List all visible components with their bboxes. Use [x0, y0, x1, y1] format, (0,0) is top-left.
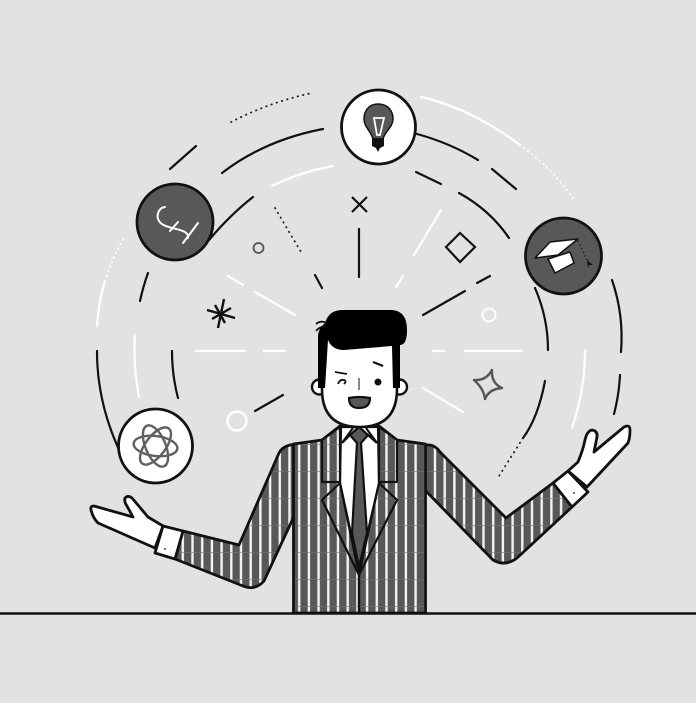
hair tuft	[316, 322, 327, 331]
white orbit dashes	[97, 97, 585, 428]
necktie	[350, 427, 368, 567]
icon: pound sign	[137, 184, 213, 260]
icon: atom	[118, 409, 192, 483]
black orbit dashes	[97, 129, 622, 456]
open eye	[374, 378, 382, 386]
floor line	[0, 612, 696, 615]
hair	[318, 310, 407, 388]
left collar and lapel	[322, 427, 340, 482]
man: left arm and hand	[91, 444, 296, 588]
jacket centre seam	[358, 573, 360, 613]
raised eyebrow	[373, 362, 383, 366]
small decorative shapes	[207, 197, 502, 430]
shirt	[340, 427, 379, 570]
smile	[349, 397, 370, 408]
man: right arm and hand	[424, 426, 630, 563]
man: jacket body	[294, 426, 426, 613]
man: head	[312, 310, 407, 427]
right collar and lapel	[379, 427, 397, 482]
winking eye	[335, 372, 347, 384]
white dotted orbit lines	[105, 145, 575, 281]
icon: light bulb	[342, 90, 416, 164]
icon: graduation cap	[526, 218, 602, 294]
nose	[358, 378, 360, 390]
dotted orbit lines	[231, 93, 523, 476]
shirt collar	[342, 428, 377, 443]
